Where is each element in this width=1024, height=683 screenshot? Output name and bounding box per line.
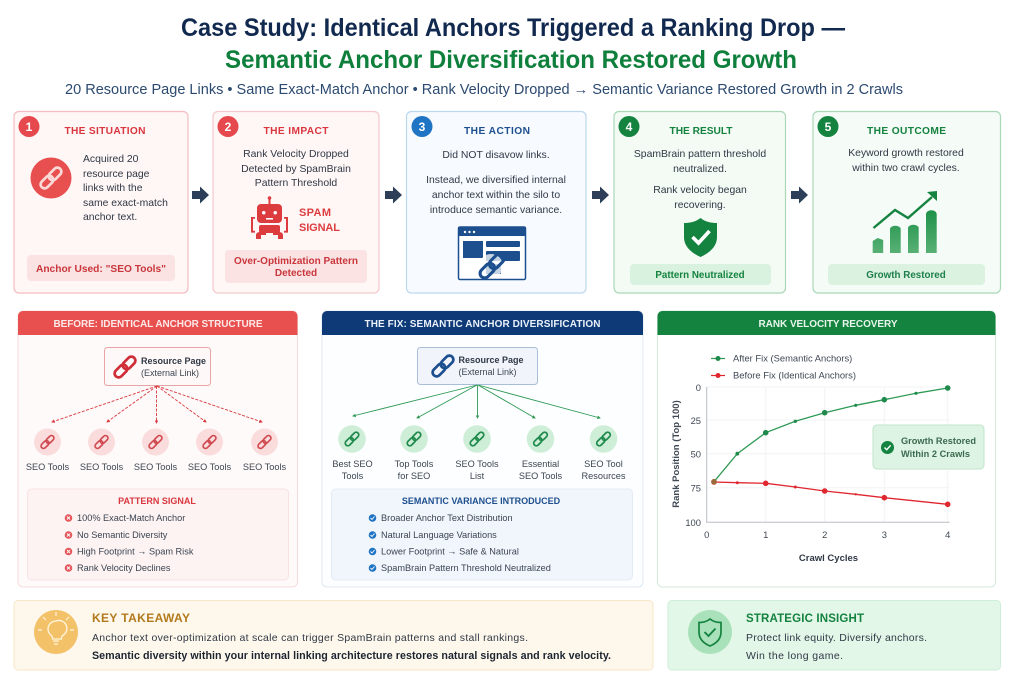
anchor nodes <box>26 428 287 472</box>
result text: neutralized. <box>673 164 727 175</box>
axis labels: 0 <box>696 382 701 393</box>
over-optimization chip: Detected <box>275 268 317 279</box>
series: after fix <box>711 385 950 485</box>
anchor nodes: SEO Tools <box>188 462 232 472</box>
action text <box>426 150 566 216</box>
anchor used chip: Anchor Used: "SEO Tools" <box>36 264 166 275</box>
subtitle: 20 Resource Page Links • Same Exact-Match Anchor • Rank Velocity Dropped → Semantic Variance Restored Growth in 2 Crawls <box>65 82 903 98</box>
anchor variation nodes <box>332 425 626 481</box>
result text: SpamBrain pattern threshold <box>634 149 766 160</box>
anchor variation nodes: for SEO <box>398 471 430 481</box>
title: Semantic Anchor Diversification Restored Growth <box>225 46 797 74</box>
pattern signal box: No Semantic Diversity <box>77 530 168 540</box>
step badge 5: 5 <box>825 120 832 134</box>
over-optimization chip: Over-Optimization Pattern <box>234 256 358 267</box>
anchor variation nodes: Tools <box>342 471 364 481</box>
chart header: RANK VELOCITY RECOVERY <box>758 319 898 330</box>
spam signal label <box>299 207 340 234</box>
step badge 2: 2 <box>225 120 232 134</box>
outcome text <box>848 148 964 174</box>
step badge 1 <box>18 116 40 137</box>
panel: the outcome <box>813 112 1000 293</box>
axis labels: 4 <box>945 529 950 540</box>
panel: the impact <box>213 112 379 293</box>
resource page box: Resource Page <box>458 355 524 365</box>
anchor variation nodes: SEO Tools <box>455 459 499 469</box>
resource page box: (External Link) <box>141 368 199 378</box>
strategic insight text: Win the long game. <box>746 650 843 662</box>
before header <box>18 311 298 335</box>
anchor nodes: SEO Tools <box>134 462 178 472</box>
panel: the action <box>406 112 586 293</box>
semantic variance box: Natural Language Variations <box>381 530 497 540</box>
step badge 3: 3 <box>419 120 426 134</box>
growth restored chip: Growth Restored <box>866 270 946 281</box>
heading: the action: THE ACTION <box>464 126 530 137</box>
anchor variation nodes: SEO Tools <box>519 471 563 481</box>
pattern signal box: Rank Velocity Declines <box>77 563 171 573</box>
heading: the impact: THE IMPACT <box>264 126 329 137</box>
situation text: Acquired 20 <box>83 154 139 165</box>
arrow 4 <box>791 186 808 204</box>
action text: introduce semantic variance. <box>430 205 562 216</box>
resource page box <box>418 348 538 384</box>
heading: the result: THE RESULT <box>670 126 733 137</box>
pattern neutralized chip <box>630 264 771 285</box>
arrow 3 <box>592 186 609 204</box>
key takeaway text <box>92 632 611 662</box>
situation text: resource page <box>83 169 150 180</box>
step badge 5 <box>818 116 838 137</box>
anchor variation nodes: Best SEO <box>332 459 373 469</box>
icon: light bulb <box>34 610 78 654</box>
impact text: Pattern Threshold <box>255 178 337 189</box>
resource page box: Resource Page <box>141 356 206 366</box>
step badge 2 <box>218 116 238 137</box>
axis labels: Rank Position (Top 100) <box>671 400 682 508</box>
situation text: anchor text. <box>83 212 137 223</box>
step badge 3 <box>412 116 432 137</box>
line chart <box>671 352 984 564</box>
axis labels: 25 <box>691 415 701 426</box>
strategic insight heading: STRATEGIC INSIGHT <box>746 613 864 625</box>
key takeaway heading: KEY TAKEAWAY <box>92 611 190 625</box>
chart header <box>658 311 996 335</box>
anchor nodes: SEO Tools <box>26 462 70 472</box>
impact text: Detected by SpamBrain <box>241 164 351 175</box>
legend: After Fix (Semantic Anchors) <box>733 352 852 364</box>
strategic insight text <box>746 632 927 662</box>
icon: robot <box>251 196 288 239</box>
semantic variance box: Broader Anchor Text Distribution <box>381 513 513 523</box>
step badge 4 <box>618 116 640 137</box>
fix header: THE FIX: SEMANTIC ANCHOR DIVERSIFICATION <box>364 319 600 330</box>
key takeaway text: Anchor text over-optimization at scale can trigger SpamBrain patterns and stall rankings. <box>92 632 528 644</box>
panel: strategic insight <box>668 600 1000 670</box>
impact text: Rank Velocity Dropped <box>243 149 349 160</box>
dashed arrows <box>52 386 262 423</box>
step badge 4: 4 <box>626 120 633 134</box>
callout: growth restored <box>873 425 984 469</box>
resource page box: (External Link) <box>458 367 517 377</box>
axis labels: 75 <box>691 482 701 494</box>
anchor nodes: SEO Tools <box>243 462 287 472</box>
panel: before <box>18 311 298 587</box>
action text: anchor text within the silo to <box>432 190 560 201</box>
outcome text: within two crawl cycles. <box>851 163 960 174</box>
axis labels: 3 <box>882 529 887 540</box>
legend: Before Fix (Identical Anchors) <box>733 370 856 380</box>
resource page box <box>104 348 210 386</box>
spam signal label: SPAM <box>299 207 331 219</box>
result text <box>634 149 766 211</box>
strategic insight text: Protect link equity. Diversify anchors. <box>746 632 927 644</box>
callout: growth restored: Within 2 Crawls <box>901 449 970 459</box>
situation text: links with the <box>83 183 143 194</box>
outcome text: Keyword growth restored <box>848 148 964 159</box>
axis labels: 100 <box>685 517 701 528</box>
semantic variance box: Lower Footprint → Safe & Natural <box>381 546 519 556</box>
action text: Instead, we diversified internal <box>426 175 566 186</box>
anchor variation nodes: Essential <box>522 459 559 469</box>
axis labels: 1 <box>763 529 768 540</box>
anchor variation nodes: List <box>470 471 485 481</box>
growth restored chip <box>828 264 985 285</box>
series: before fix <box>711 479 950 507</box>
axis labels: 0 <box>704 529 709 540</box>
pattern signal box: 100% Exact-Match Anchor <box>77 513 185 523</box>
result text: recovering. <box>674 200 726 211</box>
over-optimization chip <box>225 250 367 283</box>
title: Case Study: Identical Anchors Triggered a Ranking Drop — <box>181 14 845 42</box>
pattern signal box <box>28 489 288 580</box>
legend <box>711 352 856 380</box>
spam signal label: SIGNAL <box>299 222 340 234</box>
pattern neutralized chip: Pattern Neutralized <box>655 270 745 281</box>
icon: shield <box>684 218 717 257</box>
axis labels: 50 <box>691 448 701 460</box>
arrow 1 <box>192 186 209 204</box>
heading: the outcome: THE OUTCOME <box>867 126 946 137</box>
icon: browser with link <box>458 227 526 280</box>
icon: shield <box>688 610 732 654</box>
icon: growth chart <box>873 191 937 253</box>
semantic variance box <box>332 489 632 580</box>
semantic variance box: SEMANTIC VARIANCE INTRODUCED <box>402 496 561 506</box>
panel: the fix <box>322 311 643 587</box>
before header: BEFORE: IDENTICAL ANCHOR STRUCTURE <box>54 319 263 330</box>
action text: Did NOT disavow links. <box>442 150 550 161</box>
anchor variation nodes: Resources <box>582 471 626 481</box>
anchor nodes: SEO Tools <box>80 462 124 472</box>
impact text <box>241 149 351 189</box>
axis labels <box>671 382 950 564</box>
heading: the situation: THE SITUATION <box>64 126 146 137</box>
panel: rank velocity recovery <box>658 311 996 587</box>
anchor variation nodes: Top Tools <box>395 459 434 469</box>
pattern signal box: High Footprint → Spam Risk <box>77 546 194 556</box>
pattern signal box: PATTERN SIGNAL <box>118 496 196 506</box>
semantic variance box: SpamBrain Pattern Threshold Neutralized <box>381 563 551 573</box>
key takeaway text: Semantic diversity within your internal linking architecture restores natural signals and rank velocity. <box>92 650 611 662</box>
anchor variation nodes: SEO Tool <box>584 459 623 469</box>
axis labels: Crawl Cycles <box>799 553 858 564</box>
situation text <box>83 154 168 223</box>
anchor used chip <box>27 255 175 281</box>
step badge 1: 1 <box>26 120 33 134</box>
arrow 2 <box>385 186 402 204</box>
panel: the result <box>614 112 786 293</box>
situation text: same exact-match <box>83 198 168 209</box>
result text: Rank velocity began <box>653 185 747 196</box>
panel: the situation <box>14 112 188 293</box>
panel: key takeaway <box>14 600 653 670</box>
icon: link <box>30 158 72 198</box>
callout: growth restored: Growth Restored <box>901 436 976 446</box>
title <box>181 14 845 74</box>
green arrows <box>353 385 600 418</box>
axis labels: 2 <box>822 529 827 540</box>
fix header <box>322 311 643 335</box>
